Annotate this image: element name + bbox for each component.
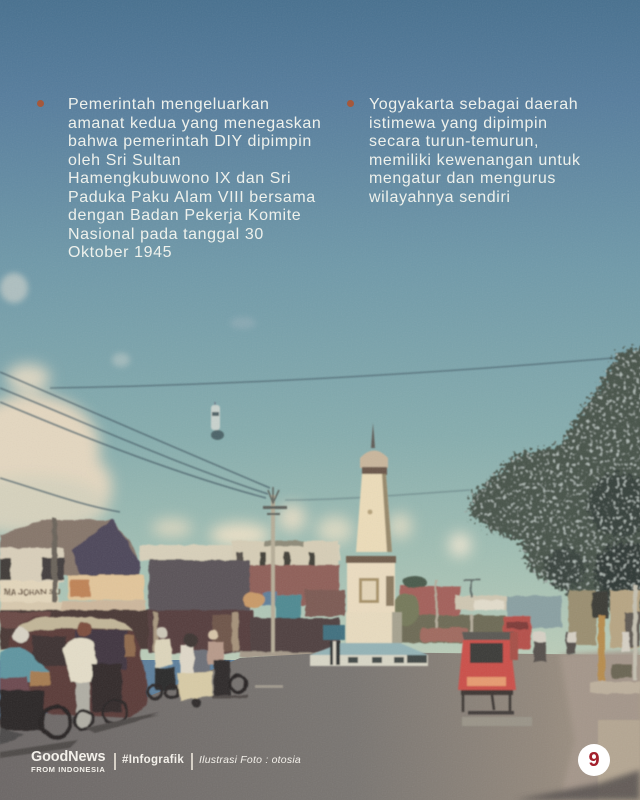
text block: first column: Oktober 1945 — [68, 244, 172, 261]
distant street: buildings and red truck — [390, 576, 562, 650]
text block: first column: Pemerintah mengeluarkan — [68, 96, 269, 113]
footer logo: GoodNews from Indonesia: FROM INDONESIA — [31, 765, 105, 774]
text block: first column: oleh Sri Sultan — [68, 152, 181, 168]
text block: second column — [369, 96, 581, 206]
text block: first column — [68, 96, 321, 261]
road — [0, 650, 640, 800]
text block: first column: Paduka Paku Alam VIII bersama — [68, 188, 316, 206]
text block: second column: memiliki kewenangan untuk — [369, 152, 581, 168]
rider behind becak — [510, 632, 518, 660]
footer logo: GoodNews from Indonesia — [31, 749, 105, 774]
Tugu monument — [310, 423, 428, 666]
power lines — [0, 357, 625, 512]
footer divider — [114, 753, 116, 770]
text block: first column: Hamengkubuwono IX dan Sri — [68, 170, 291, 187]
text block: second column: Yogyakarta sebagai daerah — [369, 96, 578, 113]
text block: second column: wilayahnya sendiri — [369, 188, 511, 206]
left buildings: MA JOHAN S.J — [4, 588, 61, 597]
footer hashtag: #Infografik — [122, 754, 184, 766]
text block: first column: amanat kedua yang menegaskan — [68, 114, 321, 132]
text block: first column: bahwa pemerintah DIY dipimpin — [68, 133, 312, 150]
middle shops and distant white building — [140, 541, 345, 657]
tree — [470, 345, 640, 620]
right side buildings and trunk — [533, 585, 640, 693]
text block: first column: Nasional pada tanggal 30 — [68, 226, 264, 242]
hanging lamp — [211, 402, 224, 440]
clouds — [0, 273, 471, 557]
text block: first column: dengan Badan Pekerja Komite — [68, 207, 301, 224]
motorcycles and scooter group — [148, 628, 247, 708]
bullet: first column — [36, 100, 44, 106]
text block: second column: secara turun-temurun, — [369, 133, 539, 150]
road shadows — [0, 712, 160, 758]
brown pedicab van and riders — [0, 617, 147, 745]
text block: second column: mengatur dan mengurus — [369, 170, 556, 187]
page number badge: 9 — [588, 749, 600, 771]
red becak — [458, 632, 516, 714]
footer logo: GoodNews from Indonesia: GoodNews — [31, 749, 105, 765]
bullet: second column — [346, 100, 354, 106]
text block: second column: istimewa yang dipimpin — [369, 114, 548, 132]
footer photo credit: Ilustrasi Foto : otosia — [199, 754, 301, 766]
left buildings — [0, 518, 150, 650]
utility pole — [263, 487, 287, 653]
footer divider — [191, 753, 193, 770]
page number badge — [578, 744, 610, 776]
